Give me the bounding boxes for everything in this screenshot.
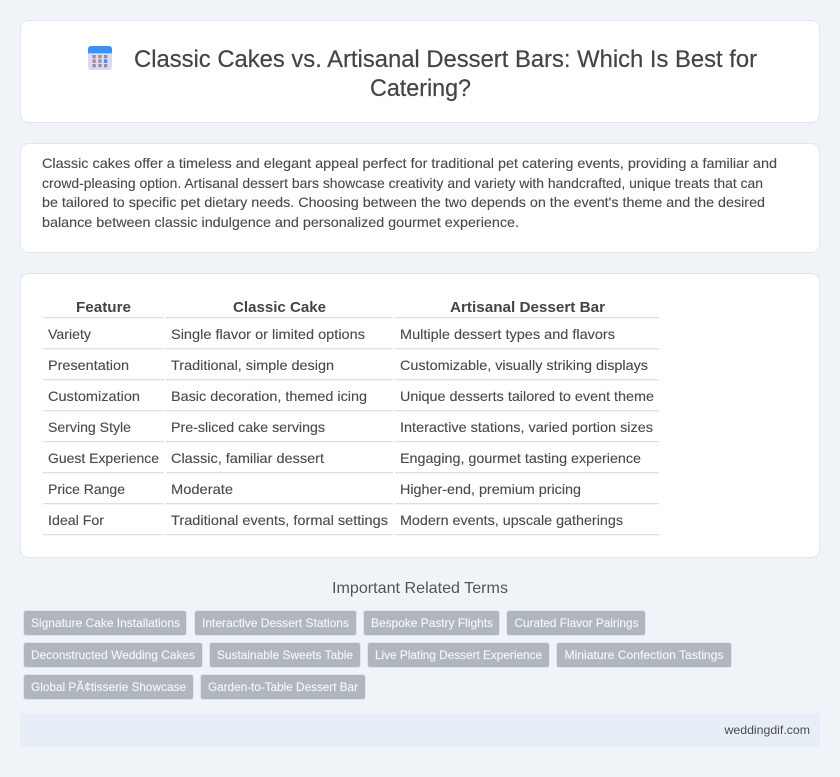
tag: Deconstructed Wedding Cakes — [31, 648, 195, 662]
summary paragraph: Classic cakes offer a timeless and elegant appeal perfect for traditional pet catering events, providing a familiar and — [42, 155, 777, 171]
row: guest experience: Classic, familiar dessert — [171, 450, 324, 466]
heading: related terms: Important Related Terms — [332, 580, 508, 597]
row: customization: Basic decoration, themed icing — [171, 388, 367, 404]
tag: Garden-to-Table Dessert Bar — [208, 680, 358, 694]
row: guest experience — [48, 450, 641, 466]
row: serving style: Interactive stations, varied portion sizes — [400, 419, 653, 435]
title — [134, 46, 757, 102]
tag — [200, 674, 366, 700]
tag: Live Plating Dessert Experience — [375, 648, 542, 662]
panel: summary — [20, 144, 820, 252]
panel: comparison table — [20, 274, 820, 558]
row: ideal for: Ideal For — [48, 512, 104, 528]
row: presentation: Traditional, simple design — [171, 357, 334, 373]
table header: Classic Cake — [233, 299, 326, 316]
tags: related terms — [24, 610, 732, 700]
row: price range: Moderate — [171, 481, 233, 497]
row: guest experience: Engaging, gourmet tasting experience — [400, 450, 641, 466]
table header — [76, 299, 605, 316]
tag — [24, 642, 202, 668]
tag — [368, 642, 550, 668]
row: guest experience: Guest Experience — [48, 450, 159, 466]
summary paragraph: balance between classic indulgence and personalized gourmet experience. — [42, 214, 519, 230]
tag — [24, 674, 194, 700]
tag: Miniature Confection Tastings — [564, 648, 724, 662]
tag — [194, 610, 356, 636]
row: ideal for — [48, 512, 623, 528]
row: serving style: Pre-sliced cake servings — [171, 419, 325, 435]
row: price range: Price Range — [48, 481, 125, 497]
summary paragraph: be tailored to specific pet dietary needs. Choosing between the two depends on the event's theme and the desired — [42, 194, 765, 210]
title: Catering? — [370, 75, 471, 102]
table header: Feature — [76, 299, 131, 316]
table rules — [43, 317, 659, 535]
row: customization — [48, 388, 654, 404]
row: customization: Customization — [48, 388, 140, 404]
tag — [24, 610, 186, 636]
footer — [20, 713, 820, 747]
row: variety — [48, 326, 615, 342]
row: serving style: Serving Style — [48, 419, 131, 435]
row: variety: Single flavor or limited options — [171, 326, 365, 342]
title: Classic Cakes vs. Artisanal Dessert Bars: Which Is Best for — [134, 46, 757, 73]
row: price range: Higher-end, premium pricing — [400, 481, 581, 497]
tag — [364, 610, 500, 636]
row: price range — [48, 481, 581, 497]
row: serving style — [48, 419, 653, 435]
panel: header — [20, 20, 820, 122]
tag: Bespoke Pastry Flights — [371, 616, 493, 630]
tag — [506, 610, 646, 636]
tag: Curated Flavor Pairings — [514, 616, 638, 630]
tag: Global PÃ¢tisserie Showcase — [31, 680, 186, 694]
row: ideal for: Modern events, upscale gatherings — [400, 512, 623, 528]
tag — [556, 642, 732, 668]
row: variety: Multiple dessert types and flavors — [400, 326, 615, 342]
summary paragraph — [42, 155, 777, 230]
summary paragraph: crowd-pleasing option. Artisanal dessert bars showcase creativity and variety with handcrafted, unique treats that can — [42, 175, 763, 191]
tag: Interactive Dessert Stations — [202, 616, 349, 630]
tag — [210, 642, 360, 668]
table header: Artisanal Dessert Bar — [450, 299, 605, 316]
tag: Sustainable Sweets Table — [217, 648, 353, 662]
footer credit: weddingdif.com — [723, 723, 810, 737]
row: ideal for: Traditional events, formal settings — [171, 512, 388, 528]
row: presentation: Presentation — [48, 357, 129, 373]
icon: calendar — [88, 46, 112, 70]
row: variety: Variety — [48, 326, 91, 342]
tag: Signature Cake Installations — [31, 616, 180, 630]
row: customization: Unique desserts tailored to event theme — [400, 388, 654, 404]
row: presentation — [48, 357, 648, 373]
row: presentation: Customizable, visually striking displays — [400, 357, 648, 373]
